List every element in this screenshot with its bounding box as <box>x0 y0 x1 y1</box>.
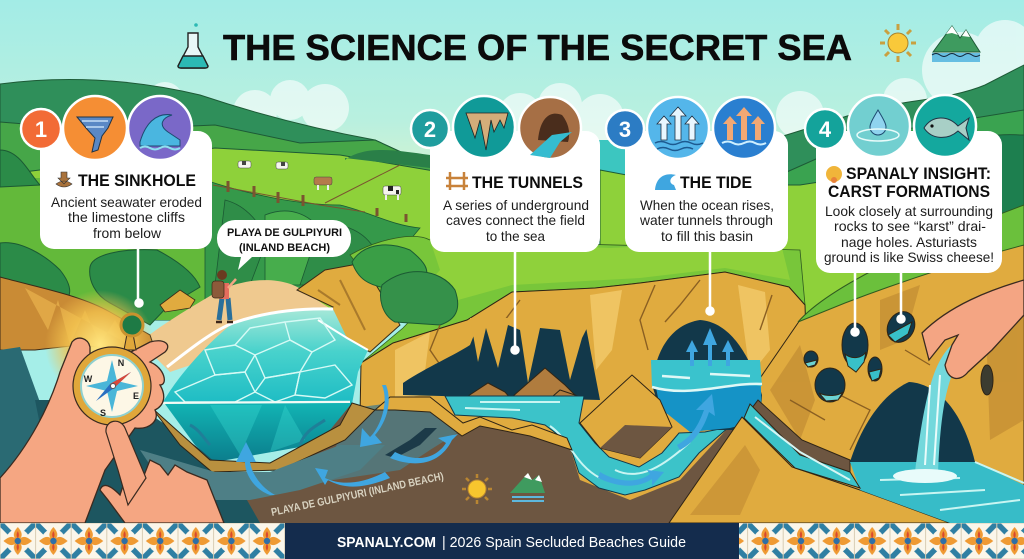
callout: beach label <box>217 220 351 270</box>
body text: Ancient seawater eroded <box>51 195 202 210</box>
icon: cave <box>519 97 581 159</box>
river bank rock <box>375 397 572 450</box>
step number 1 <box>21 109 61 149</box>
dark teal rock <box>0 347 100 523</box>
step number 1: 1 <box>35 117 47 142</box>
body text: Look closely at surrounding <box>825 204 993 219</box>
right cave <box>850 382 975 462</box>
river brown bank <box>752 400 850 472</box>
right cave water <box>850 462 1024 523</box>
circulation arrows <box>236 385 458 495</box>
tide arrows <box>677 328 734 450</box>
callout: beach label: PLAYA DE GULPIYURI <box>227 227 342 239</box>
bottom ground label: PLAYA DE GULPIYURI (INLAND BEACH) <box>270 471 445 519</box>
river to right cave <box>744 404 860 488</box>
compass glow <box>45 290 155 400</box>
heading: the sinkhole: THE SINKHOLE <box>78 172 196 190</box>
compass: S <box>100 408 106 418</box>
valley greenery <box>205 180 420 300</box>
step number 2 <box>411 110 449 148</box>
pool surface <box>162 309 368 404</box>
small gold rock on beach <box>160 290 195 312</box>
central cave <box>403 318 600 400</box>
footer bar: | 2026 Spain Secluded Beaches Guide <box>442 534 686 551</box>
right golden cliff <box>745 215 1024 523</box>
body text: water tunnels through <box>639 213 773 228</box>
body text <box>639 198 774 244</box>
central rock mound <box>580 375 672 458</box>
cows <box>238 161 401 200</box>
left golden cliff <box>0 277 155 350</box>
hiker figure <box>212 270 236 322</box>
foreground grass slope <box>350 236 805 363</box>
panel: the tide <box>606 97 788 252</box>
underwater section <box>165 403 352 462</box>
icon: tide arrows <box>713 97 775 159</box>
far bush band <box>345 150 430 168</box>
heading: spanaly insight: CARST FORMATIONS <box>828 183 990 201</box>
compass <box>73 314 151 425</box>
footer tile strip right <box>739 523 1024 559</box>
tide basin <box>652 320 762 430</box>
icon: stalactites <box>453 96 515 158</box>
step number 4 <box>805 109 845 149</box>
rock fissure <box>385 428 437 458</box>
sea on the horizon <box>590 140 650 175</box>
icon: wave <box>128 96 192 160</box>
icon: water drop <box>848 95 910 157</box>
body text: caves connect the field <box>446 213 585 228</box>
footer bar <box>285 523 739 559</box>
right hand <box>922 280 1024 378</box>
pool rim <box>152 403 375 472</box>
body text: to fill this basin <box>661 229 753 244</box>
step number 3 <box>606 110 644 148</box>
body text <box>824 204 994 265</box>
foreground golden mountain <box>669 417 950 523</box>
index finger on compass <box>106 421 146 505</box>
title icon: mountains and water <box>932 26 980 62</box>
leader lines <box>136 249 904 354</box>
left hand <box>0 338 224 523</box>
title: THE SCIENCE OF THE SECRET SEA <box>223 27 852 68</box>
fence <box>213 165 406 222</box>
brown underground <box>215 398 742 523</box>
icon: small sun <box>462 474 492 504</box>
callout: beach label: (INLAND BEACH) <box>239 242 330 254</box>
heading: spanaly insight: SPANALY INSIGHT: <box>846 165 991 183</box>
body text: When the ocean rises, <box>640 198 774 213</box>
heading: the tide: THE TIDE <box>680 174 752 192</box>
step number 3: 3 <box>619 117 631 142</box>
body text: nage holes. Asturiasts <box>841 235 977 250</box>
body text: rocks to see “karst” drai- <box>834 219 986 234</box>
river arrow <box>598 470 664 486</box>
icon: rising water arrows <box>647 97 709 159</box>
left bushes <box>0 150 200 325</box>
cave boulders <box>462 368 580 404</box>
footer tile strip left <box>0 523 285 559</box>
waterfall <box>893 342 958 483</box>
underground river <box>445 396 729 495</box>
stalactites <box>470 318 592 383</box>
body text: A series of underground <box>443 198 589 213</box>
body text: from below <box>93 226 161 241</box>
step number 4: 4 <box>819 117 832 142</box>
central golden cliff <box>358 272 812 523</box>
beach sand <box>140 280 340 372</box>
heading: spanaly insight <box>826 165 991 201</box>
sky background <box>0 0 1024 220</box>
right grass edge <box>798 205 1024 322</box>
icon: small mountains <box>510 473 545 501</box>
compass: W <box>84 374 93 384</box>
body text <box>51 195 202 241</box>
compass: N <box>118 358 124 368</box>
icon: tornado <box>63 96 127 160</box>
right cliff holes <box>804 307 993 402</box>
body text: to the sea <box>486 229 545 244</box>
beach bushes <box>352 245 458 325</box>
small cliff by the beach <box>297 263 400 352</box>
footer bar: SPANALY.COM <box>337 534 436 551</box>
body text: the limestone cliffs <box>68 210 185 225</box>
heading: the tunnels: THE TUNNELS <box>472 174 583 192</box>
title icon: flask <box>178 23 208 68</box>
body text: ground is like Swiss cheese! <box>824 250 994 265</box>
title icon: sun <box>880 24 916 62</box>
step number 2: 2 <box>424 117 436 142</box>
icon: fish <box>914 95 976 157</box>
clouds <box>147 20 1024 142</box>
panel: the tunnels <box>411 96 600 252</box>
background hills <box>0 65 1024 320</box>
underground flow <box>140 445 385 500</box>
body text <box>443 198 589 244</box>
panel: spanaly insight <box>805 95 1002 273</box>
panel: the sinkhole <box>21 96 212 249</box>
compass: E <box>133 391 139 401</box>
